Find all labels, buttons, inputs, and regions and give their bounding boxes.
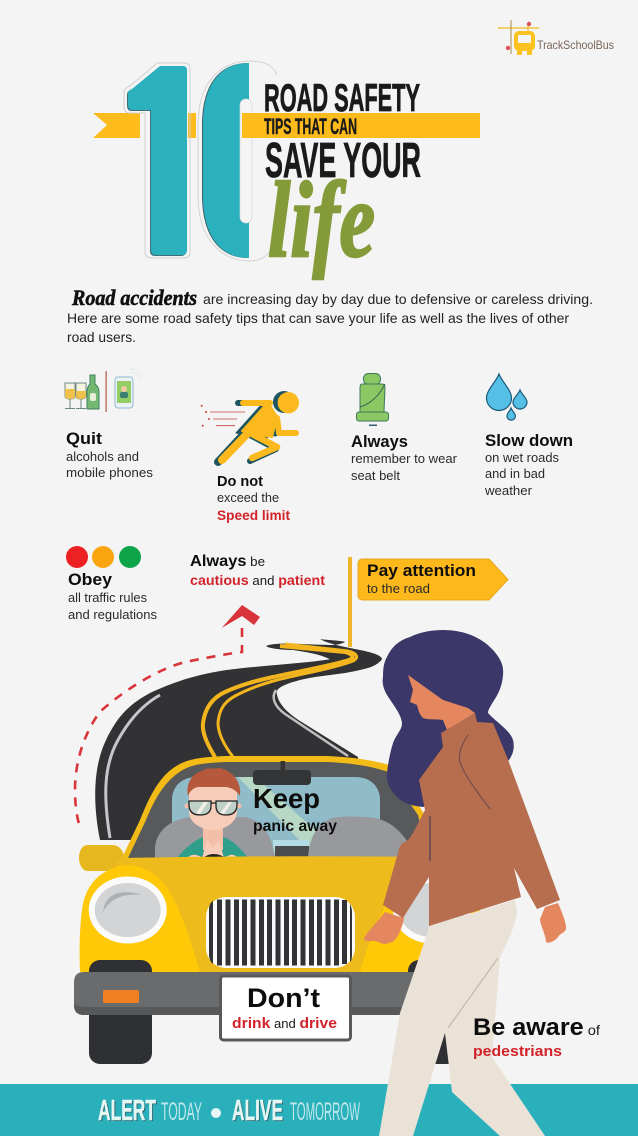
- label: be aware of pedestrians: pedestrians: [473, 1043, 562, 1060]
- license plate: don't drink and drive: drink and drive: [232, 1015, 337, 1032]
- woman: jacket: [383, 713, 560, 926]
- icon: water drops: [486, 374, 527, 420]
- driver: sunglasses: [189, 801, 237, 815]
- car: rear view mirror: [253, 761, 311, 785]
- winding road: [95, 639, 382, 840]
- woman: jacket seams: [430, 735, 490, 860]
- tip: seat belt: remember to wear: [351, 452, 457, 466]
- title text: TIPS THAT CAN: [264, 114, 357, 139]
- logo: TrackSchoolBus: [498, 20, 614, 55]
- label: be aware of pedestrians: Be aware of: [473, 1014, 600, 1041]
- car: [74, 756, 486, 1064]
- tip: do not speed: Do not: [217, 473, 263, 490]
- car: grille: [206, 897, 355, 968]
- tip: cautious and patient: [190, 553, 325, 588]
- tip: slow down: [484, 374, 573, 498]
- tip: cautious and patient: Always be: [190, 553, 265, 570]
- tip: do not speed: Speed limit: [217, 507, 290, 523]
- car: bumper: [74, 972, 486, 1015]
- title text: ROAD SAFETY: [264, 77, 420, 120]
- label: keep panic away: Keep: [253, 783, 320, 814]
- car: hood: [84, 856, 480, 972]
- footer band: TODAY: [161, 1098, 202, 1126]
- label: keep panic away: panic away: [253, 818, 337, 835]
- driver: [177, 768, 248, 858]
- tip: do not speed: [201, 391, 299, 523]
- intro text: are increasing day by day due to defensive or careless driving.: [203, 291, 593, 307]
- tip: seat belt: [351, 374, 457, 483]
- car: side mirror: [79, 845, 124, 871]
- label: keep panic away: [253, 783, 337, 835]
- tip: pay attention sign: to the road: [367, 582, 430, 596]
- title text: [264, 77, 421, 280]
- intro text: Here are some road safety tips that can save your life as well as the lives of other: [67, 310, 569, 326]
- arrow: red dashed path: [75, 605, 260, 830]
- car: windshield frame: [120, 756, 436, 862]
- footer band: TOMORROW: [290, 1098, 360, 1126]
- intro text: Road accidents: [71, 285, 197, 310]
- icon: traffic lights: [66, 546, 141, 568]
- car: headlights: [89, 876, 471, 944]
- tip: slow down: weather: [484, 484, 532, 498]
- title text: life: [268, 161, 375, 280]
- icon: glasses and bottle: [65, 369, 143, 412]
- footer band: ALIVE: [232, 1095, 283, 1127]
- tip: quit alcohol and phones: [65, 369, 153, 480]
- tip: do not speed: exceed the: [217, 491, 279, 505]
- footer band: ALERT: [99, 1096, 157, 1128]
- tip: seat belt: Always: [351, 432, 408, 451]
- tip: slow down: and in bad: [485, 467, 545, 481]
- footer band: [0, 1084, 638, 1136]
- car: fenders: [80, 865, 482, 972]
- tip: seat belt: seat belt: [351, 469, 401, 483]
- tip: obey traffic rules: Obey: [68, 570, 113, 589]
- title graphic: 10 with ribbon: [93, 61, 480, 261]
- tip: quit alcohol and phones: alcohols and: [66, 450, 139, 464]
- woman: face: [408, 675, 475, 730]
- icon: running figure: [201, 391, 299, 462]
- car: wheels: [89, 960, 471, 1064]
- tip: obey traffic rules: [66, 546, 157, 622]
- intro text: [67, 285, 593, 345]
- license plate: don't drink and drive: Don’t: [247, 983, 320, 1013]
- tip: slow down: Slow down: [485, 431, 573, 450]
- tip: cautious and patient: cautious and patient: [190, 572, 325, 588]
- tip: pay attention sign: Pay attention: [367, 561, 476, 580]
- tip: obey traffic rules: all traffic rules: [68, 591, 147, 605]
- label: be aware of pedestrians: [473, 1014, 600, 1060]
- car: seats: [155, 816, 414, 858]
- pedestrian woman: [364, 630, 566, 1136]
- tip: obey traffic rules: and regulations: [68, 608, 157, 622]
- footer band: ALERT: [98, 1095, 156, 1127]
- tip: quit alcohol and phones: Quit: [66, 429, 102, 448]
- intro text: road users.: [67, 329, 136, 345]
- title text: SAVE YOUR: [265, 134, 421, 188]
- tip: pay attention sign: [348, 557, 508, 647]
- tip: slow down: on wet roads: [485, 451, 559, 465]
- woman: trousers: [379, 900, 545, 1136]
- footer band: ALIVE: [233, 1096, 284, 1128]
- icon: car seat: [356, 374, 388, 426]
- woman: hair: [383, 630, 514, 807]
- woman: hands: [364, 903, 566, 944]
- license plate: don't drink and drive: [220, 976, 350, 1040]
- tip: quit alcohol and phones: mobile phones: [66, 466, 153, 480]
- logo: TrackSchoolBus: TrackSchoolBus: [537, 38, 614, 52]
- car: windshield glass: [172, 777, 380, 857]
